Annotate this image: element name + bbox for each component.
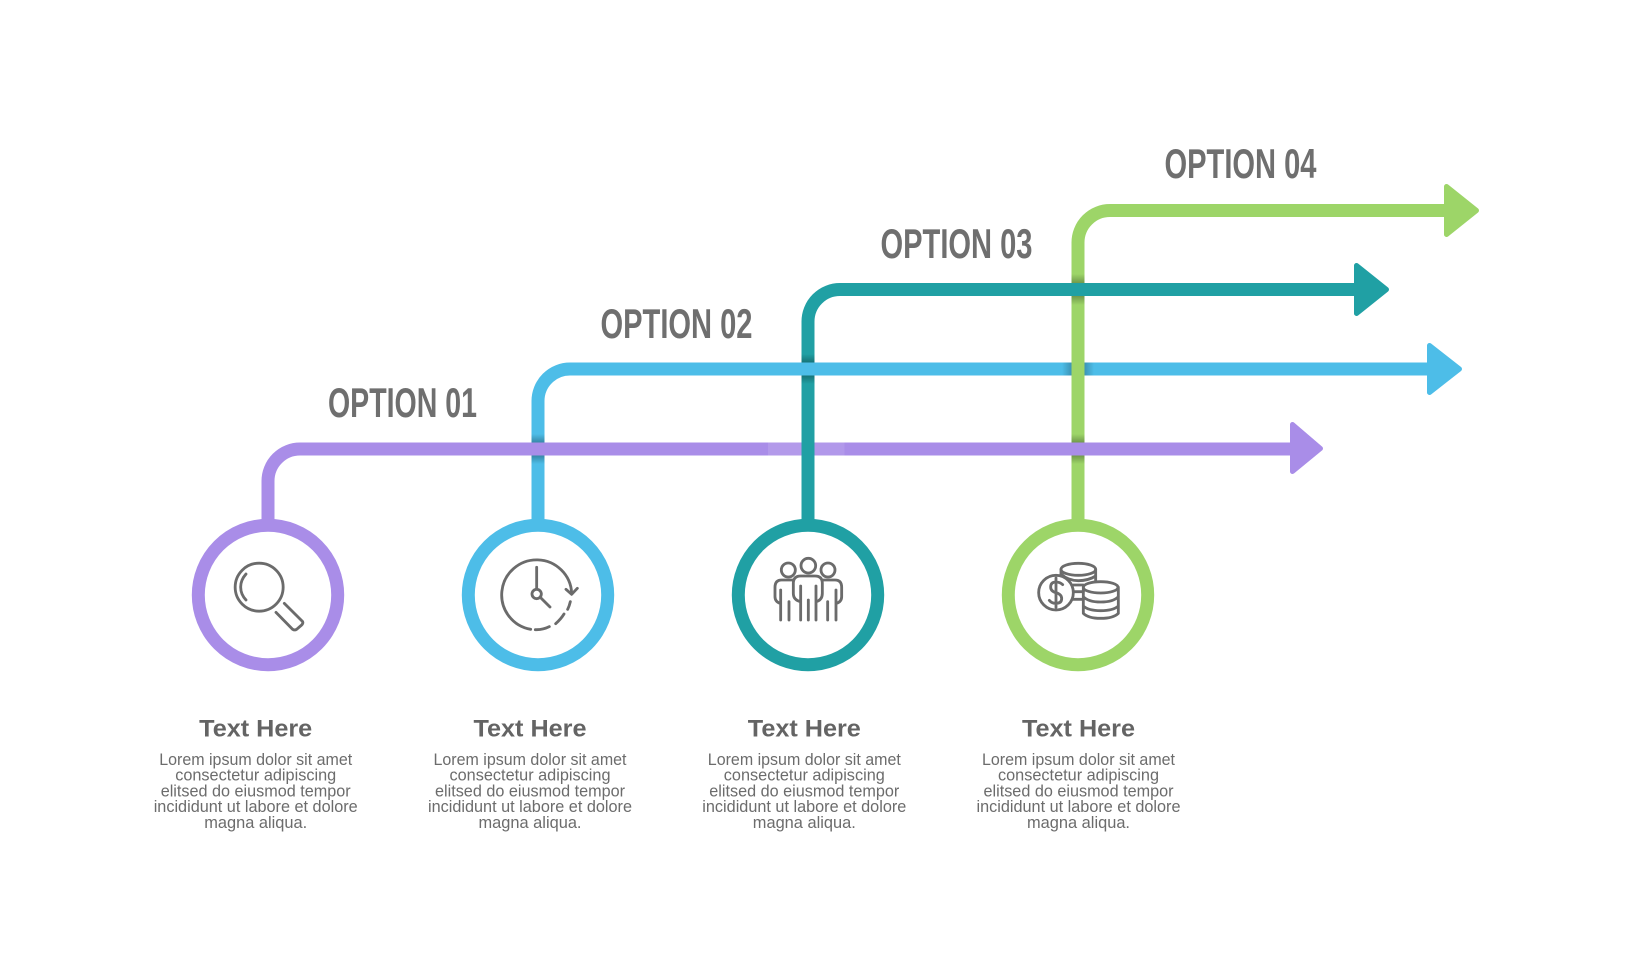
heading: option 01: OPTION 01 (328, 379, 477, 426)
text block: option 03: incididunt ut labore et dolore (702, 797, 906, 816)
heading: option 03: OPTION 03 (880, 220, 1032, 267)
text block: option 04: elitsed do eiusmod tempor (984, 781, 1174, 800)
text block: option 04: Text Here (1022, 716, 1135, 742)
text block: option 01: magna aliqua. (204, 813, 307, 832)
text block: option 04: Lorem ipsum dolor sit amet (982, 750, 1175, 769)
text block: option 04: incididunt ut labore et dolore (976, 797, 1180, 816)
text block: option 04: magna aliqua. (1027, 813, 1130, 832)
icon: clock with dashed arrow (502, 560, 577, 630)
text block: option 03: consectetur adipiscing (724, 766, 885, 785)
text block: option 04 (976, 716, 1180, 832)
circle: option 03 (738, 525, 878, 665)
arrow: option 02 blue (538, 346, 1460, 525)
text block: option 02: Text Here (474, 716, 586, 742)
text block: option 01: Lorem ipsum dolor sit amet (159, 750, 352, 769)
arrow: option 03 teal (808, 266, 1386, 525)
arrow: option 01 purple (268, 424, 1320, 525)
arrow: option 04 green (1078, 186, 1476, 525)
circle: option 02 (468, 525, 608, 665)
text block: option 02 (428, 716, 632, 832)
icon: group of people (775, 558, 842, 620)
text block: option 03: elitsed do eiusmod tempor (709, 781, 900, 800)
text block: option 02: elitsed do eiusmod tempor (435, 781, 625, 800)
icon: magnifying glass (235, 563, 303, 630)
circle: option 01 (198, 525, 338, 665)
crossings where the lines weave over and under (525, 274, 1094, 464)
text block: option 01 (154, 716, 358, 832)
icon: dollar coin and coin stacks (1039, 563, 1118, 618)
heading: option 02: OPTION 02 (600, 300, 752, 347)
text block: option 01: incididunt ut labore et dolore (154, 797, 358, 816)
text block: option 03: magna aliqua. (753, 813, 856, 832)
text block: option 02: consectetur adipiscing (450, 766, 610, 785)
text block: option 01: consectetur adipiscing (175, 766, 336, 785)
text block: option 02: incididunt ut labore et dolore (428, 797, 632, 816)
heading: option 04: OPTION 04 (1164, 140, 1317, 187)
text block: option 01: Text Here (199, 716, 312, 742)
circle: option 04 (1008, 525, 1148, 665)
text block: option 04: consectetur adipiscing (998, 766, 1159, 785)
text block: option 01: elitsed do eiusmod tempor (161, 781, 351, 800)
text block: option 02: magna aliqua. (478, 813, 582, 832)
text block: option 03 (702, 716, 906, 832)
text block: option 03: Text Here (748, 716, 861, 742)
text block: option 02: Lorem ipsum dolor sit amet (434, 750, 627, 769)
text block: option 03: Lorem ipsum dolor sit amet (708, 750, 901, 769)
